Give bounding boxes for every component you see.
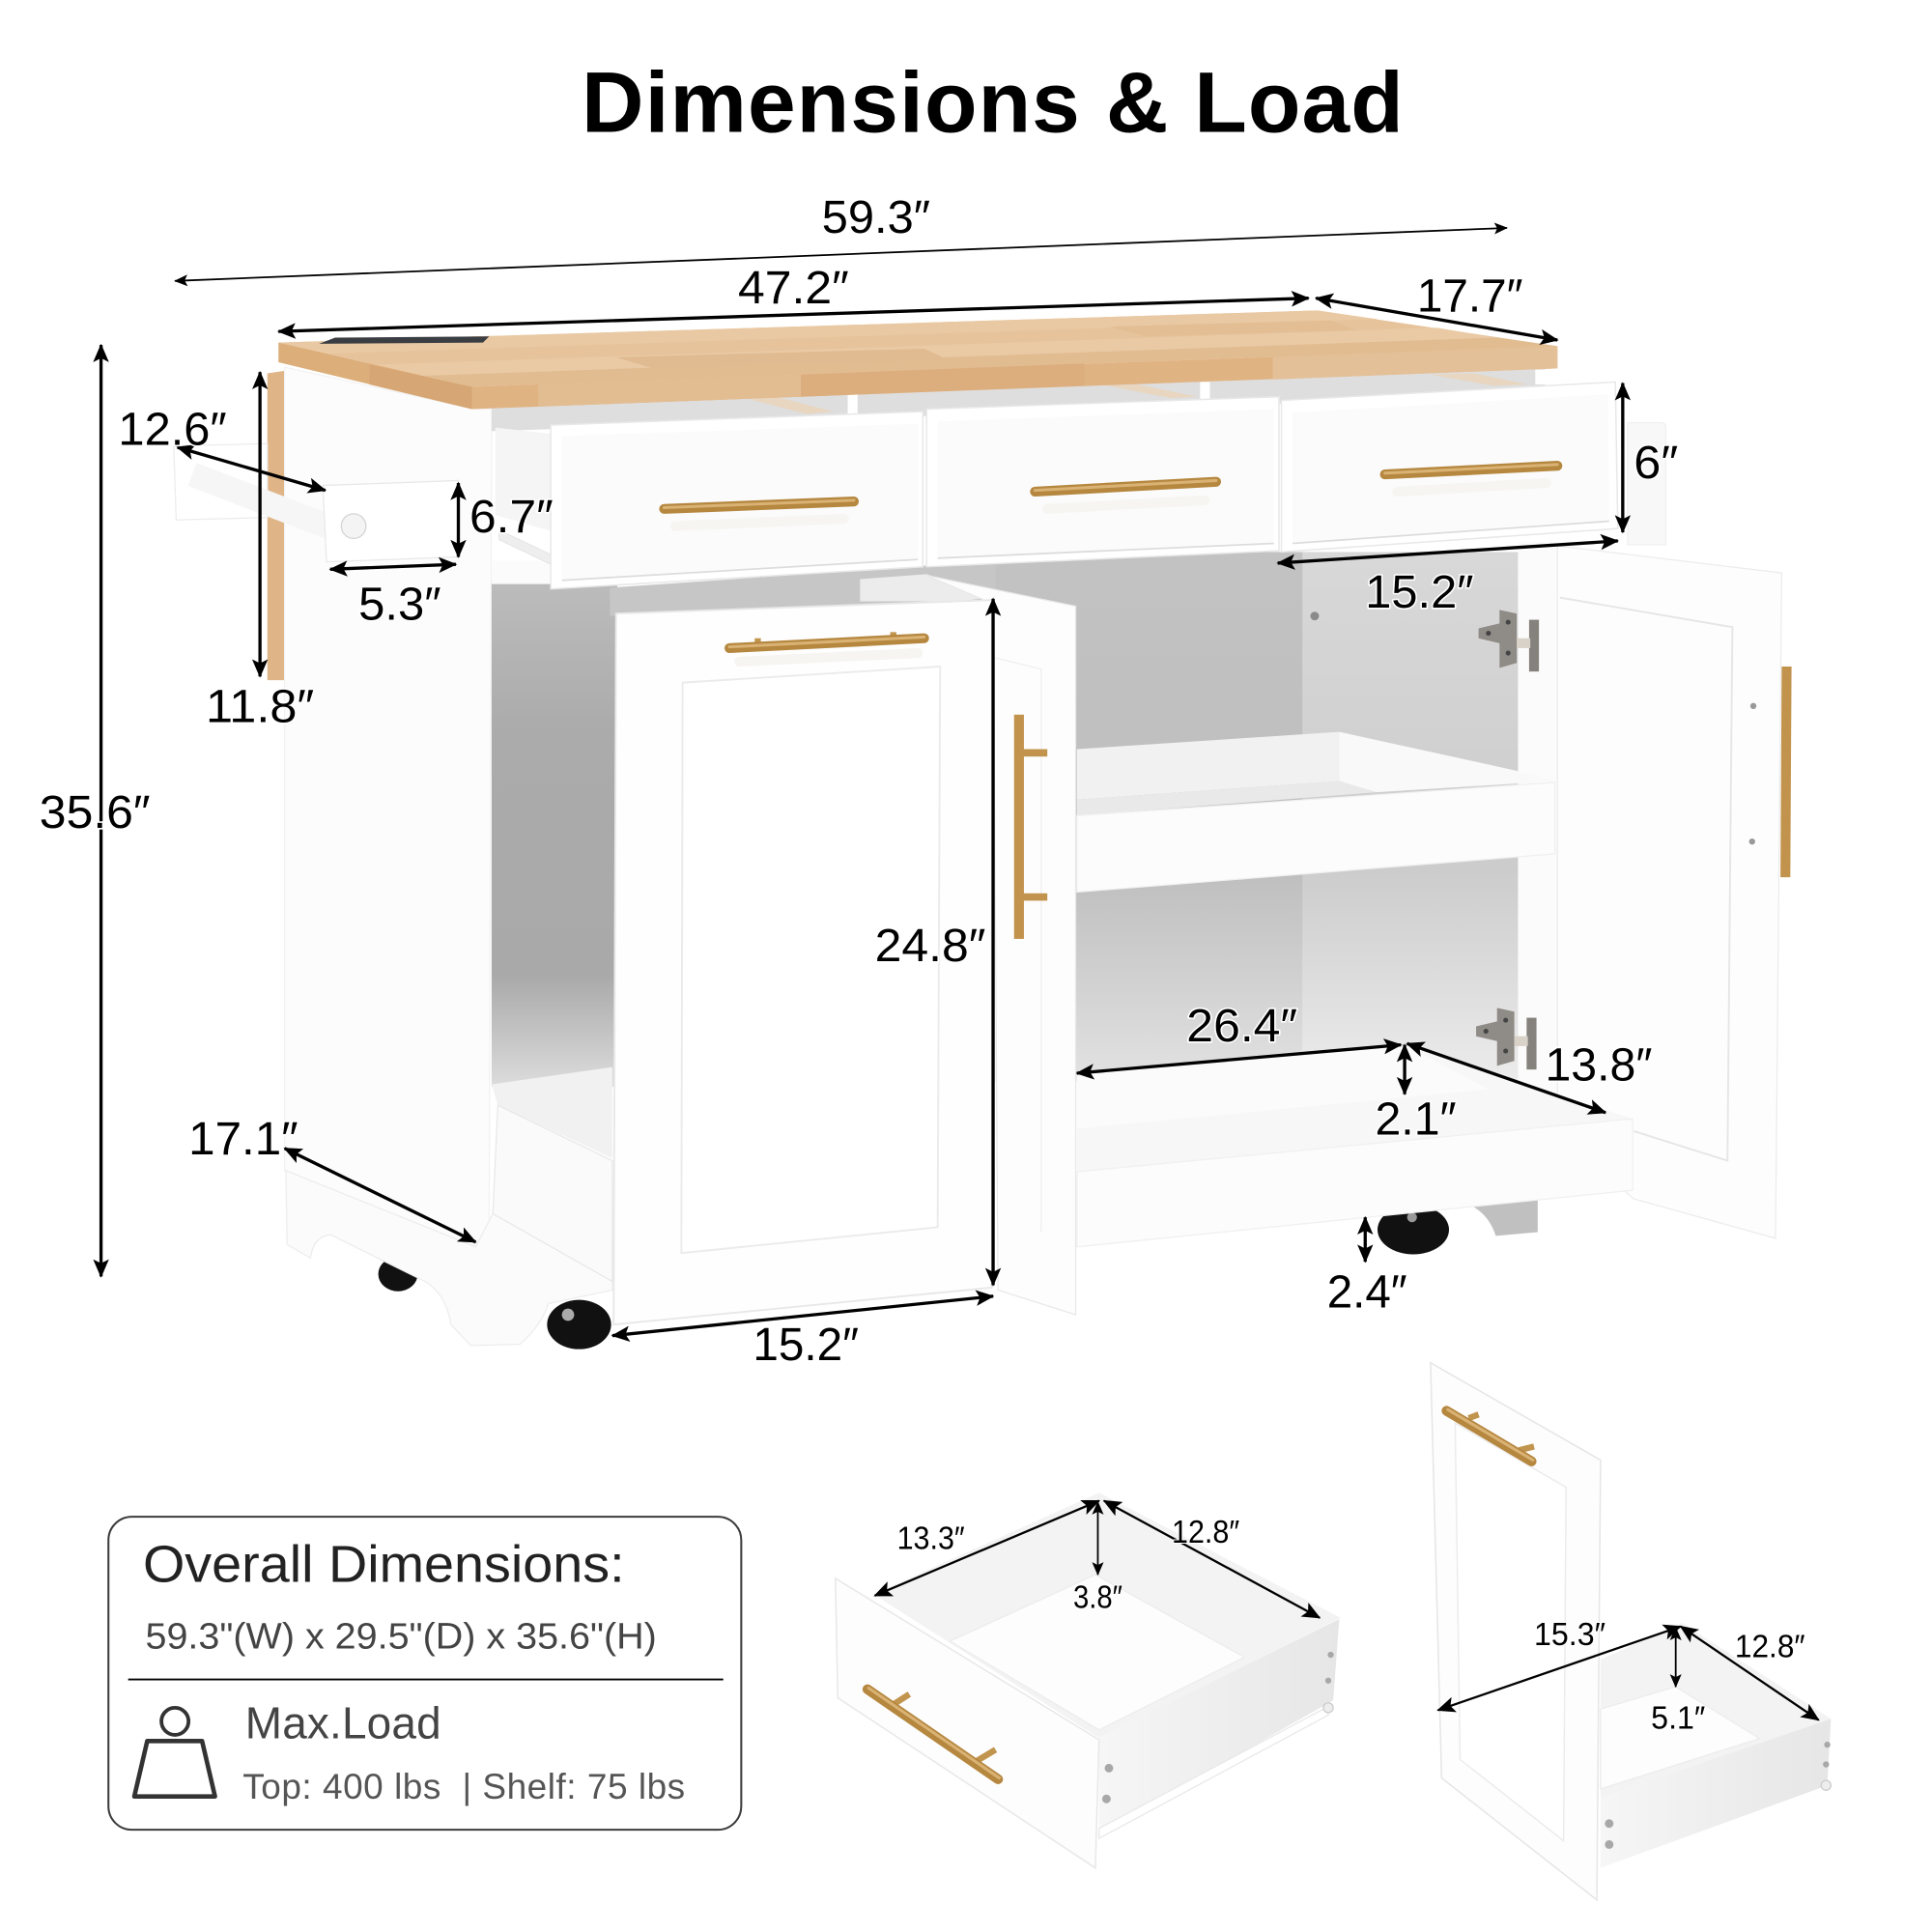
drawer height arrow <box>1096 1502 1098 1575</box>
main kitchen island illustration <box>174 310 1792 1350</box>
mounting hole <box>1311 611 1319 620</box>
label 17.7: 17.7″ <box>1417 270 1523 323</box>
drawer width arrow <box>875 1501 1099 1596</box>
tall door front <box>1431 1363 1601 1900</box>
door drawer illustration <box>1431 1363 1831 1900</box>
door height arrow <box>992 599 994 1285</box>
label 11.8: 11.8″ <box>206 680 314 732</box>
right drawer handle <box>1385 465 1557 492</box>
middle drawer <box>926 397 1279 567</box>
label 17.1: 17.1″ <box>188 1113 298 1165</box>
heading: max load: Max.Load <box>245 1698 441 1748</box>
shelf width arrow <box>1077 1045 1401 1073</box>
label 35.6: 35.6″ <box>40 786 151 838</box>
label 13.8: 13.8″ <box>1545 1039 1652 1092</box>
door drawer interior <box>1601 1623 1831 1799</box>
drawer screws <box>1102 1652 1334 1804</box>
upper pull-out shelf <box>1077 732 1555 892</box>
right door <box>1557 546 1781 1238</box>
label 13.3: 13.3″ <box>897 1520 965 1556</box>
bottom pull-out tray <box>1077 1045 1633 1247</box>
door drawer side <box>1601 1719 1831 1868</box>
towel bar rear bracket <box>174 443 308 520</box>
label 12.8 drawer: 12.8″ <box>1172 1515 1239 1550</box>
wood supports under counter <box>750 373 1528 414</box>
heading: overall dimensions: Overall Dimensions: <box>143 1537 625 1594</box>
drawer side <box>1099 1619 1339 1833</box>
left compartment interior <box>492 579 617 1087</box>
drawer slide rail <box>1099 1707 1328 1838</box>
side panel <box>285 367 492 1246</box>
title: Dimensions & Load <box>582 53 1404 150</box>
label 47.2: 47.2″ <box>738 262 849 314</box>
label 12.8 door drawer: 12.8″ <box>1735 1630 1805 1665</box>
rear wheel <box>379 1257 417 1292</box>
lower hinge <box>1476 1008 1537 1069</box>
towel bar <box>192 474 330 527</box>
drawer interior <box>875 1493 1339 1737</box>
label 26.4: 26.4″ <box>1186 1000 1297 1052</box>
drop leaf arrow <box>259 372 261 676</box>
drawer dividers <box>848 370 1545 414</box>
middle drawer handle <box>1035 480 1216 509</box>
front cabinet door <box>613 600 992 1324</box>
drawer depth arrow <box>1104 1501 1320 1618</box>
centre compartment right wall <box>1302 552 1520 1082</box>
towel bar length arrow <box>178 447 326 491</box>
right jamb <box>1518 542 1560 1133</box>
label 15.2 lower: 15.2″ <box>753 1319 859 1371</box>
centre door handle <box>1014 715 1047 939</box>
drawer height arrow <box>1622 384 1624 532</box>
plinth base <box>286 1171 612 1346</box>
right door handle <box>1780 667 1792 877</box>
door drawer floor <box>1601 1687 1759 1789</box>
charging strip <box>319 336 489 344</box>
right foot <box>1470 1195 1538 1236</box>
right wheel <box>1378 1205 1449 1254</box>
left drawer handle <box>665 500 854 526</box>
overall width arrow <box>175 228 1507 281</box>
icon: weight <box>134 1708 215 1797</box>
drawer illustration <box>836 1493 1339 1868</box>
label 2.4: 2.4″ <box>1327 1265 1407 1318</box>
drop leaf edge <box>268 371 285 680</box>
drawer slide <box>499 529 551 564</box>
label 6.7: 6.7″ <box>469 491 554 543</box>
rear panel corner <box>1628 423 1665 545</box>
label 59.3: 59.3″ <box>822 191 930 243</box>
door drawer height arrow <box>1675 1628 1677 1687</box>
label 5.3: 5.3″ <box>358 579 441 631</box>
door handle <box>1446 1409 1534 1462</box>
door drawer depth arrow <box>1681 1627 1819 1720</box>
right drawer <box>1282 382 1618 552</box>
max load values: Top: 400 lbs | Shelf: 75 lbs <box>242 1767 685 1806</box>
label 6: 6″ <box>1634 437 1678 489</box>
label 15.2 upper: 15.2″ <box>1365 566 1474 618</box>
height arrow <box>99 345 102 1276</box>
upper hinge <box>1479 610 1539 671</box>
drawer floor <box>950 1575 1244 1730</box>
shelf rail height arrow <box>1404 1045 1406 1094</box>
towel bracket height arrow <box>457 483 460 557</box>
front wheel <box>547 1300 611 1350</box>
drawer front <box>836 1578 1099 1868</box>
towel bracket width arrow <box>330 564 456 569</box>
left drawer <box>551 412 923 589</box>
label 5.1: 5.1″ <box>1651 1701 1706 1737</box>
label 24.8: 24.8″ <box>875 920 985 972</box>
door drawer width arrow <box>1438 1627 1681 1710</box>
drawer handle <box>867 1688 999 1779</box>
centre compartment back wall <box>996 552 1303 1082</box>
panel: overall dimensions and max load <box>108 1517 741 1830</box>
front door handle <box>729 632 924 662</box>
lower tray behind front door <box>860 574 996 601</box>
label 2.1: 2.1″ <box>1375 1094 1457 1146</box>
strip behind front door <box>610 560 998 616</box>
drawer width arrow <box>1278 541 1618 563</box>
towel bar front bracket <box>323 480 458 562</box>
side depth arrow <box>285 1149 475 1242</box>
label 12.6: 12.6″ <box>118 403 227 455</box>
countertop <box>278 310 1557 409</box>
left drawer side <box>496 428 551 531</box>
top depth arrow <box>1316 298 1557 340</box>
door recessed panel <box>1455 1423 1566 1841</box>
door width arrow <box>612 1296 993 1336</box>
shelf depth arrow <box>1407 1043 1605 1113</box>
under-counter gap <box>492 368 1545 431</box>
clearance arrow <box>1364 1217 1367 1262</box>
label 3.8: 3.8″ <box>1073 1580 1122 1616</box>
label 15.3: 15.3″ <box>1534 1617 1605 1653</box>
left pull-out tray <box>492 1067 612 1282</box>
centre door (open) <box>926 576 1076 1315</box>
rail above left compartment <box>492 560 554 584</box>
door drawer screws <box>1605 1742 1831 1849</box>
top length arrow <box>278 298 1309 331</box>
overall dimension values: 59.3"(W) x 29.5"(D) x 35.6"(H) <box>146 1616 657 1658</box>
